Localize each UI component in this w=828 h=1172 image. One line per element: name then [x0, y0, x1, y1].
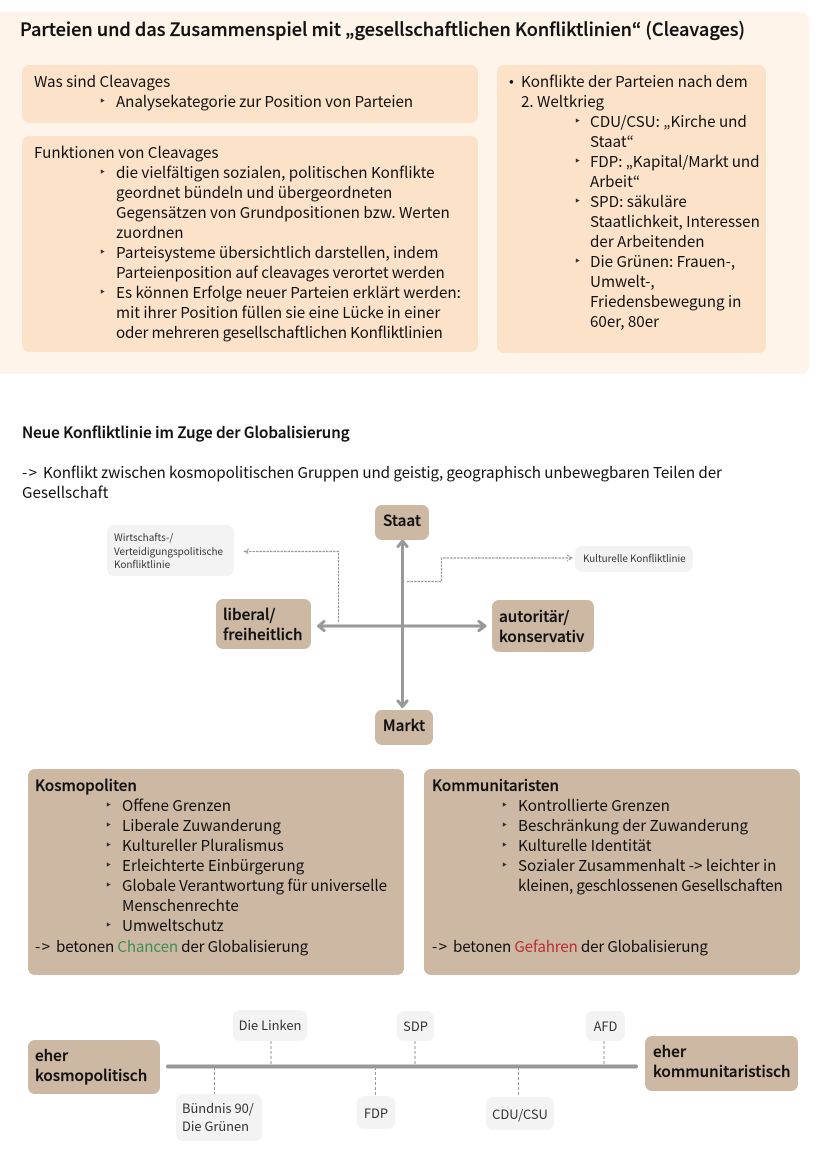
text: CDU/CSU: [574, 110, 747, 152]
scale end: eher kommunitaristisch: kommunitaristisch: [653, 1060, 790, 1082]
text: Konflikt intro: Gesellschaft: [22, 481, 108, 503]
text: function bullet 3: mit ihrer Position füllen sie eine Lücke in einer: [116, 301, 440, 323]
callout: Kulturelle Konfliktlinie: [575, 546, 693, 572]
list: Kosmopoliten positions: ‣: [105, 916, 112, 933]
heading: Neue Konfliktlinie: Neue Konfliktlinie im Zuge der Globalisierung: [22, 421, 349, 443]
text: function bullet 2: Parteisysteme übersichtlich darstellen, indem: [116, 241, 438, 263]
text: CDU/CSU: CDU/CSU: „Kirche und: [590, 110, 747, 132]
text: function bullet 1: ‣: [99, 163, 106, 180]
text: Die Grünen: ‣: [574, 252, 581, 269]
list: Kosmopoliten positions: [105, 794, 387, 936]
list: Kosmopoliten positions: Umweltschutz: [122, 914, 224, 936]
panel: cleavages background: [0, 12, 809, 374]
node: autoritär/konservativ: autoritär/: [499, 605, 569, 627]
text: function bullet 2: [99, 241, 445, 283]
callout: Wirtschafts-/Verteidigungspolitische Konfliktlinie: Konfliktlinie: [114, 556, 170, 571]
list: Kosmopoliten positions: Liberale Zuwanderung: [122, 814, 281, 836]
list: Kosmopoliten positions: Menschenrechte: [122, 894, 239, 916]
text: SPD: [574, 190, 760, 252]
scale end: eher kosmopolitisch: [28, 1040, 160, 1094]
text: Die Grünen: Umwelt-,: [590, 270, 655, 292]
text: heading: [509, 70, 748, 112]
text: function bullet 1: geordnet bündeln und übergeordneten: [116, 181, 392, 203]
text: function bullet 1: zuordnen: [116, 221, 184, 243]
list: Kommunitaristen positions: [501, 794, 783, 896]
scale end: eher kosmopolitisch: eher: [35, 1044, 68, 1066]
text: function bullet 3: [99, 281, 461, 343]
text: definition: ‣: [99, 92, 106, 109]
text: SPD: der Arbeitenden: [590, 230, 704, 252]
panel: Was sind Cleavages: [22, 65, 478, 123]
text: function bullet 2: ‣: [99, 243, 106, 260]
text: FDP: FDP: „Kapital/Markt und: [590, 150, 759, 172]
text: heading: Konflikte der Parteien nach dem: [521, 70, 748, 92]
text: CDU/CSU: ‣: [574, 112, 581, 129]
panel: Kommunitaristen: [424, 769, 800, 975]
list: Kommunitaristen positions: kleinen, geschlossenen Gesellschaften: [518, 874, 783, 896]
list: Kosmopoliten positions: Erleichterte Einbürgerung: [122, 854, 304, 876]
text: function bullet 1: Gegensätzen von Grundpositionen bzw. Werten: [116, 201, 450, 223]
list: Kosmopoliten positions: Offene Grenzen: [122, 794, 231, 816]
node: Markt: Markt: [383, 714, 425, 736]
party: Die Linken: Die Linken: [239, 1015, 301, 1034]
text: Die Grünen: 60er, 80er: [590, 310, 659, 332]
party: SDP: SDP: [403, 1016, 428, 1035]
party: FDP: [357, 1096, 395, 1129]
party: Die Linken: [233, 1010, 307, 1041]
party: Bündnis 90/Die Grünen: [176, 1094, 262, 1141]
list: Kommunitaristen positions: ‣: [501, 836, 508, 853]
text: function bullet 1: [99, 161, 450, 243]
node: liberal/freiheitlich: liberal/: [223, 603, 275, 625]
text: function bullet 2: Parteienposition auf cleavages verortet werden: [116, 261, 445, 283]
list: Kommunitaristen positions: Sozialer Zusammenhalt -> leichter in: [518, 854, 776, 876]
node: liberal/freiheitlich: [216, 599, 311, 649]
list: Kommunitaristen positions: Kontrollierte Grenzen: [518, 794, 670, 816]
node: liberal/freiheitlich: freiheitlich: [223, 623, 302, 645]
node: Staat: [375, 505, 429, 540]
text: function bullet 1: die vielfältigen sozialen, politischen Konflikte: [116, 161, 434, 183]
text: Chancen conclusion: -> betonen Chancen der Globalisierung: [35, 935, 308, 957]
list: Kosmopoliten positions: Kultureller Pluralismus: [122, 834, 284, 856]
list: Kosmopoliten positions: ‣: [105, 856, 112, 873]
party: AFD: [586, 1011, 625, 1041]
list: Kosmopoliten positions: ‣: [105, 796, 112, 813]
party: CDU/CSU: CDU/CSU: [492, 1104, 548, 1123]
party: Bündnis 90/Die Grünen: Bündnis 90/: [182, 1098, 254, 1117]
scale end: eher kommunitaristisch: eher: [653, 1040, 686, 1062]
text: heading: Funktionen von Cleavages: [34, 141, 219, 163]
text: heading: •: [509, 71, 514, 91]
callout: Wirtschafts-/Verteidigungspolitische Konfliktlinie: Wirtschafts-/: [114, 529, 173, 544]
list: Kosmopoliten positions: Globale Verantwortung für universelle: [122, 874, 387, 896]
title: Parteien und das Zusammenspiel mit „gesellschaftlichen Konfliktlinien“ (Cleavages): [20, 16, 745, 42]
text: heading: 2. Weltkrieg: [521, 90, 604, 112]
party: AFD: AFD: [594, 1016, 617, 1035]
callout: Wirtschafts-/Verteidigungspolitische Konfliktlinie: [107, 525, 234, 576]
text: SPD: ‣: [574, 192, 581, 209]
text: CDU/CSU: Staat“: [590, 130, 634, 152]
text: FDP: ‣: [574, 152, 581, 169]
callout: Kulturelle Konfliktlinie: Kulturelle Konfliktlinie: [583, 551, 686, 565]
text: Die Grünen: [574, 250, 741, 332]
party: Bündnis 90/Die Grünen: Die Grünen: [182, 1116, 249, 1135]
node: Markt: [375, 710, 433, 745]
text: Gefahren conclusion: -> betonen Gefahren der Globalisierung: [432, 935, 708, 957]
party: FDP: FDP: [364, 1103, 388, 1122]
list: Kommunitaristen positions: ‣: [501, 816, 508, 833]
text: SPD: SPD: säkuläre: [590, 190, 687, 212]
party: CDU/CSU: [486, 1097, 554, 1130]
text: definition: Analysekategorie zur Position von Parteien: [116, 90, 413, 112]
panel: Funktionen von Cleavages: [22, 136, 478, 352]
heading: Kommunitaristen: Kommunitaristen: [432, 774, 559, 796]
text: Die Grünen: Die Grünen: Frauen-,: [590, 250, 735, 272]
list: Kosmopoliten positions: ‣: [105, 816, 112, 833]
text: FDP: Arbeit“: [590, 170, 640, 192]
heading: Kosmopoliten: Kosmopoliten: [35, 774, 137, 796]
scale end: eher kommunitaristisch: [645, 1036, 798, 1091]
text: FDP: [574, 150, 759, 192]
list: Kosmopoliten positions: ‣: [105, 876, 112, 893]
text: SPD: Staatlichkeit, Interessen: [590, 210, 760, 232]
node: Staat: Staat: [383, 509, 421, 531]
list: Kosmopoliten positions: ‣: [105, 836, 112, 853]
text: question: Was sind Cleavages: [34, 70, 170, 92]
text: function bullet 3: Es können Erfolge neuer Parteien erklärt werden:: [116, 281, 461, 303]
text: function bullet 3: oder mehreren gesellschaftlichen Konfliktlinien: [116, 321, 443, 343]
text: Konflikt intro: -> Konflikt zwischen kosmopolitischen Gruppen und geistig, geographisch unbewegbaren Teilen der: [22, 461, 722, 483]
party: SDP: [397, 1011, 434, 1041]
scale end: eher kosmopolitisch: kosmopolitisch: [35, 1064, 147, 1086]
list: Kommunitaristen positions: ‣: [501, 796, 508, 813]
node: autoritär/konservativ: [492, 600, 594, 652]
text: Konflikt intro: [22, 461, 722, 503]
list: Kommunitaristen positions: Kulturelle Identität: [518, 834, 651, 856]
text: function bullet 3: ‣: [99, 283, 106, 300]
callout: Wirtschafts-/Verteidigungspolitische Konfliktlinie: Verteidigungspolitische: [114, 542, 223, 558]
list: Kommunitaristen positions: Beschränkung der Zuwanderung: [518, 814, 748, 836]
list: Kommunitaristen positions: ‣: [501, 856, 508, 873]
node: autoritär/konservativ: konservativ: [499, 625, 584, 647]
panel: Konflikte der Parteien: [497, 65, 766, 353]
text: Die Grünen: Friedensbewegung in: [590, 290, 741, 312]
panel: Kosmopoliten: [28, 769, 404, 975]
